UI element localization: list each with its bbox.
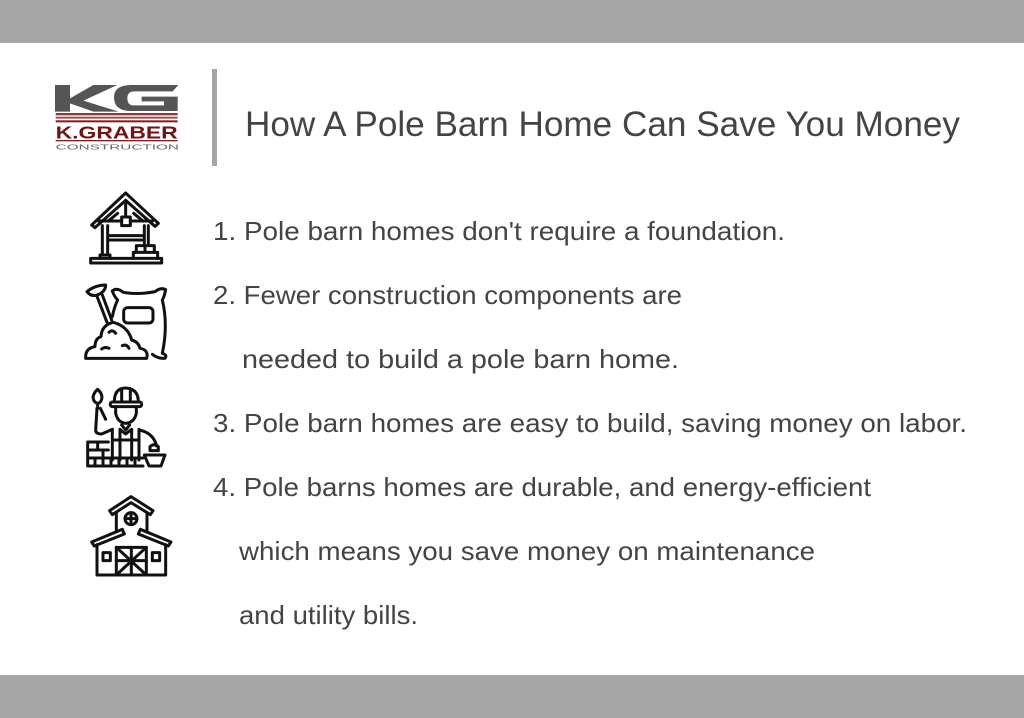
point 2, second line: needed to build a pole barn home. [242,344,679,374]
point 4, third line: and utility bills. [239,600,418,630]
point 4, second line: which means you save money on maintenance [238,536,815,566]
logo: K.Graber Construction [55,85,179,151]
title: How A Pole Barn Home Can Save You Money [245,105,960,144]
logo: K.Graber Construction: CONSTRUCTION [56,142,179,151]
point 1: 1. Pole barn homes don't require a foundation. [213,216,785,246]
bottom grey band [0,675,1024,718]
icon: pole barn frame [91,193,162,263]
icon: construction worker with bricks [88,388,165,466]
top grey band [0,0,1024,43]
icon: cement bag and shovel [86,285,166,358]
logo: K.Graber Construction: K.GRABER [56,122,178,142]
point 2, first line: 2. Fewer construction components are [213,280,682,310]
vertical divider [212,69,217,166]
point 4, first line: 4. Pole barns homes are durable, and energy-efficient [213,472,872,502]
point 3: 3. Pole barn homes are easy to build, saving money on labor. [213,408,967,438]
icon: barn house [92,497,171,575]
